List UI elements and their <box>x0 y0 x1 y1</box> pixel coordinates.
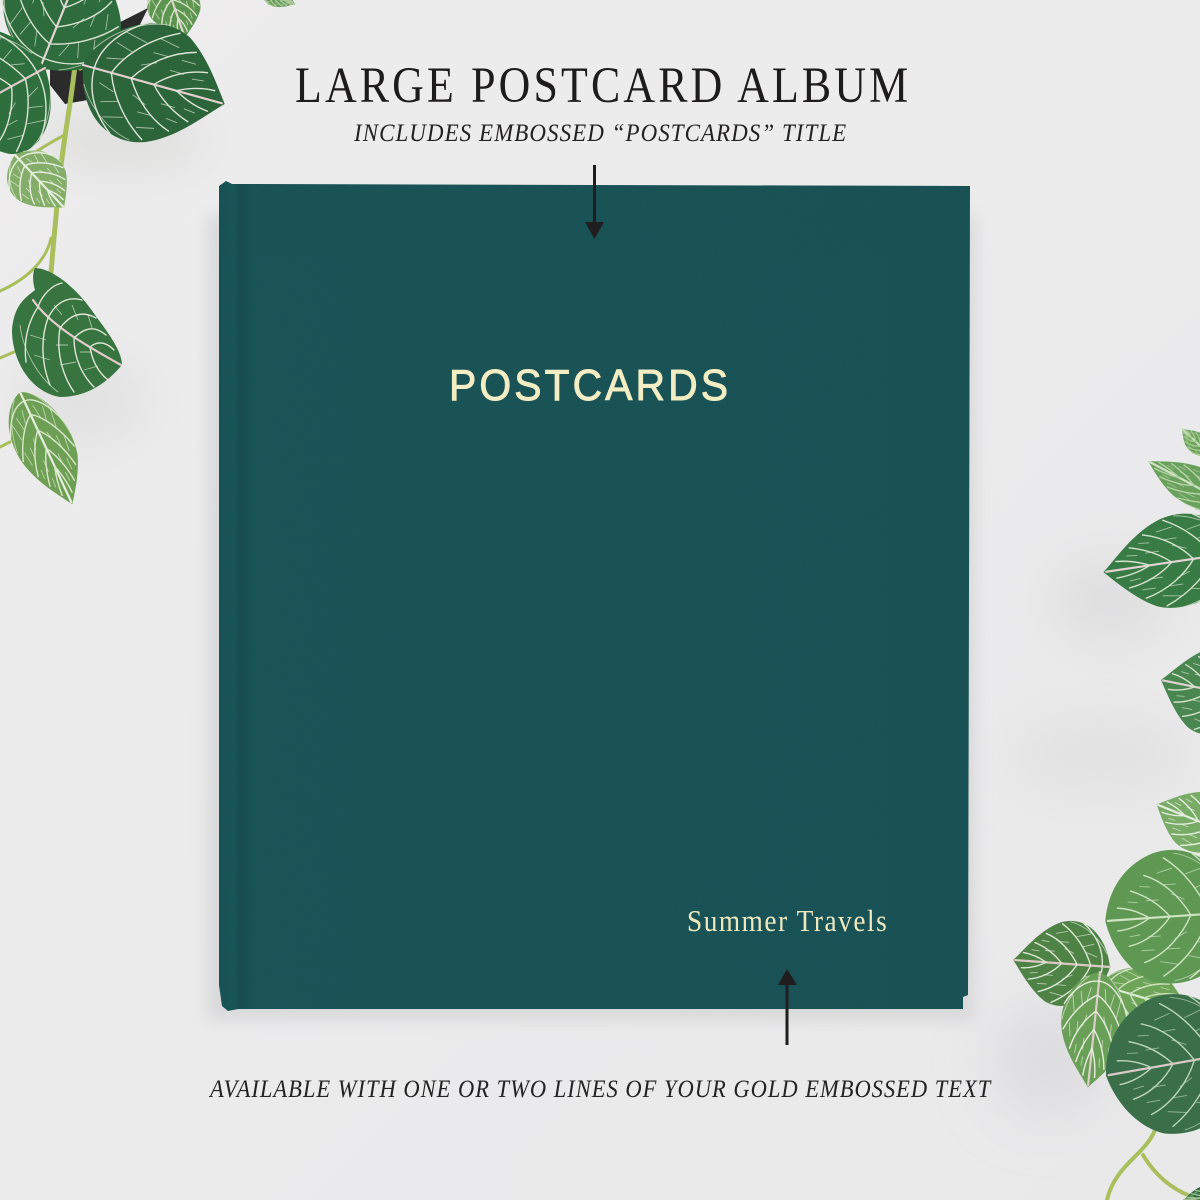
leaf: r6 <box>1010 917 1113 1010</box>
foliage: top left <box>0 0 298 517</box>
arrow: up to personalised text <box>778 969 797 1045</box>
arrow: down to title <box>585 165 604 239</box>
title: POSTCARDS: POSTCARDS <box>449 362 728 410</box>
foliage: right <box>1010 421 1200 1200</box>
leaf: small light <box>0 135 85 227</box>
leaf: r7b <box>1092 956 1197 1040</box>
caption: AVAILABLE WITH ONE OR TWO LINES OF YOUR GOLD EMBOSSED TEXT <box>208 1076 992 1103</box>
panel: album cover <box>219 181 970 1011</box>
leaf: middle <box>12 268 122 397</box>
personalised text: Summer Travels: Summer Travels <box>687 904 887 938</box>
heading: LARGE POSTCARD ALBUM <box>295 58 908 114</box>
leaf: r0 <box>1175 421 1200 463</box>
book shadow <box>207 215 975 1020</box>
leaf: top small <box>259 0 298 13</box>
leaf: r1 <box>1139 443 1200 528</box>
leaf: bottom light <box>0 380 99 517</box>
leaf: left large <box>0 11 76 179</box>
subheading: INCLUDES EMBOSSED “POSTCARDS” TITLE <box>353 120 847 147</box>
leaf: top large <box>0 0 147 91</box>
leaf: r2 <box>1097 506 1200 618</box>
stems <box>1107 1130 1190 1200</box>
leaf: r5 <box>1101 846 1200 988</box>
leaf: r8 <box>1094 984 1200 1145</box>
leaf: r4 <box>1145 775 1200 867</box>
leaf: r3 <box>1152 635 1200 745</box>
leaf: bottom corner <box>1182 1183 1200 1200</box>
leaf: upper light <box>140 0 210 46</box>
leaf: r7 <box>1054 968 1133 1091</box>
stems <box>0 55 96 447</box>
dark shade behind leaves <box>50 8 148 104</box>
leaf: centre large <box>67 6 241 163</box>
